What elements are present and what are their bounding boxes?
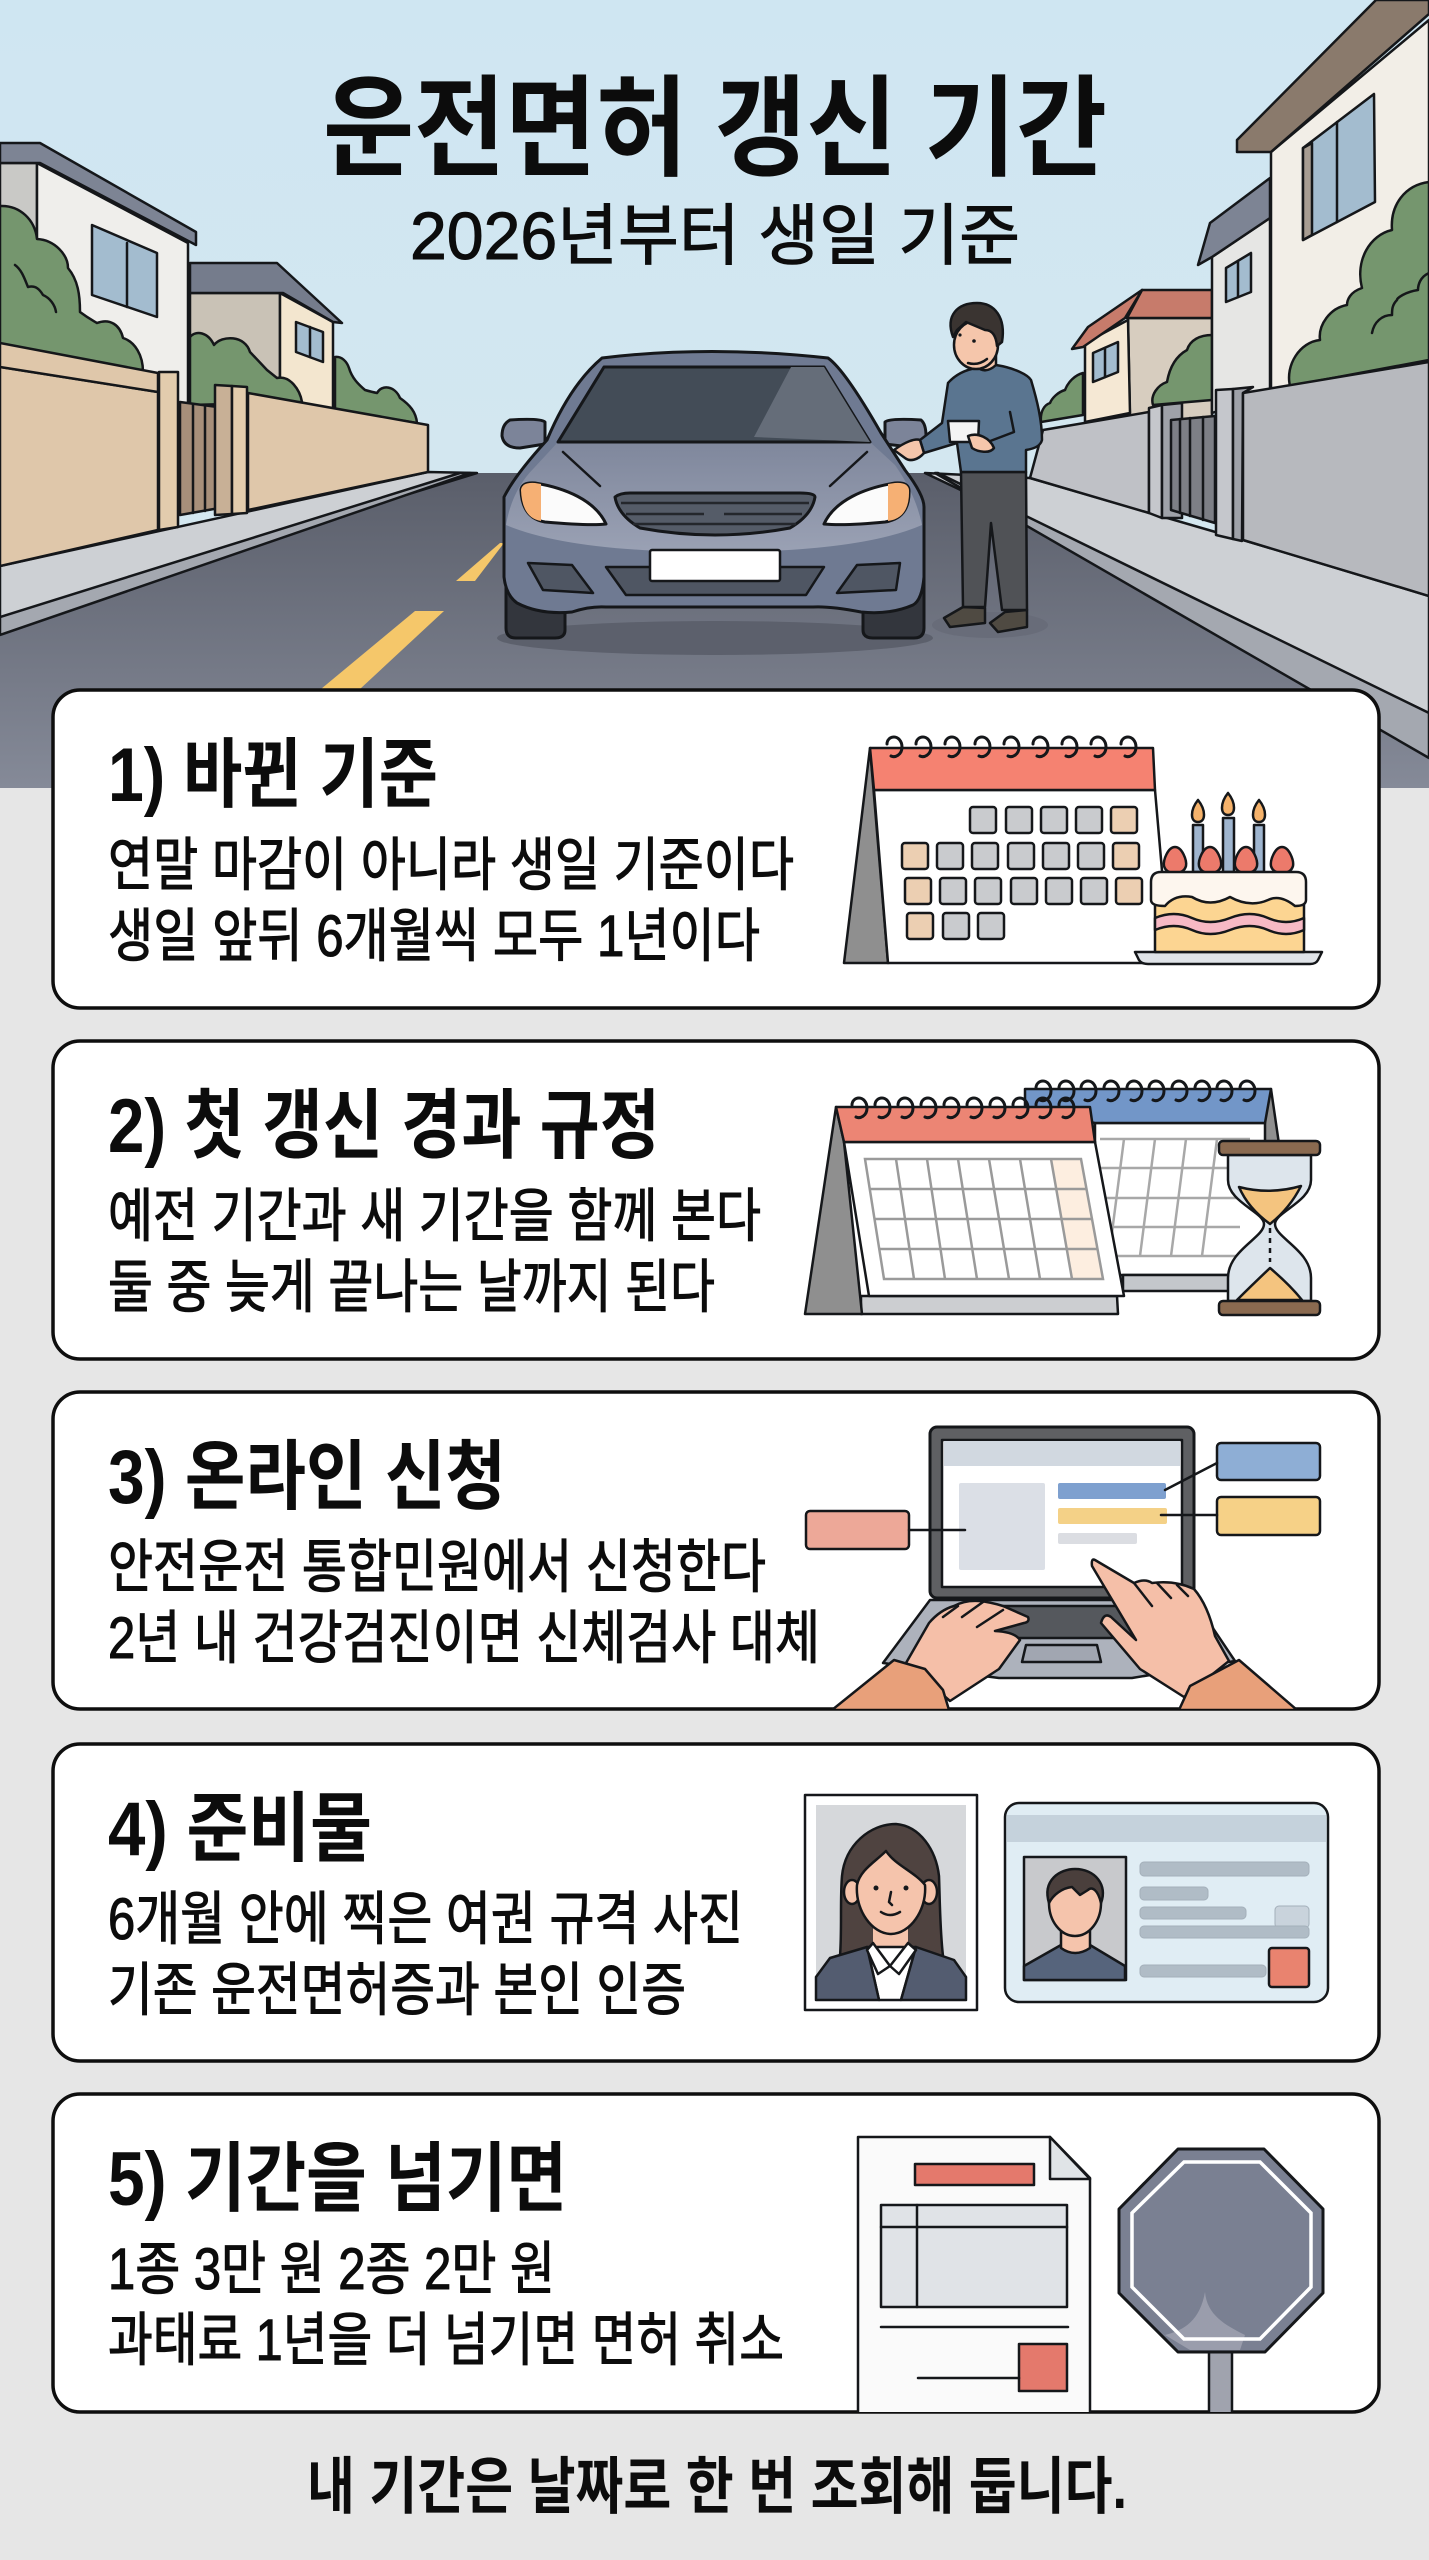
panel 3: online application bbox=[53, 1392, 1379, 1710]
footer note: 내 기간은 날짜로 한 번 조회해 둡니다. bbox=[307, 2453, 1127, 2522]
panel 4: required items bbox=[53, 1744, 1379, 2061]
hero illustration: street scene bbox=[0, 0, 1429, 788]
panel 2: first renewal transition rule bbox=[53, 1041, 1379, 1359]
text block 4: 6개월 안에 찍은 여권 규격 사진 bbox=[108, 1887, 743, 1952]
text block 1: 연말 마감이 아니라 생일 기준이다 bbox=[108, 833, 794, 898]
text block 3: 2년 내 건강검진이면 신체검사 대체 bbox=[108, 1606, 820, 1671]
icon: penalty notice document bbox=[858, 2137, 1090, 2414]
icon: blank stop sign bbox=[1119, 2149, 1323, 2414]
text block 5: 과태료 1년을 더 넘기면 면허 취소 bbox=[108, 2308, 784, 2373]
road, walls and sidewalks bbox=[0, 343, 1429, 788]
text block 2: 예전 기간과 새 기간을 함께 본다 bbox=[108, 1184, 761, 1249]
icon: two calendars and hourglass bbox=[805, 1081, 1320, 1315]
text block 5: 1종 3만 원 2종 2만 원 bbox=[108, 2237, 555, 2302]
text block 4 bbox=[108, 1887, 743, 2023]
text block 2: 둘 중 늦게 끝나는 날까지 된다 bbox=[108, 1255, 715, 1320]
text block 5 bbox=[108, 2237, 784, 2373]
man holding license bbox=[894, 303, 1048, 638]
heading 5: 5) 기간을 넘기면 bbox=[108, 2137, 567, 2222]
icon: passport photo bbox=[805, 1795, 977, 2010]
left houses bbox=[0, 143, 417, 423]
heading 3: 3) 온라인 신청 bbox=[108, 1435, 506, 1520]
icon: laptop with hands bbox=[806, 1427, 1320, 1710]
title: 운전면허 갱신 기간 bbox=[323, 68, 1107, 191]
subtitle: 2026년부터 생일 기준 bbox=[410, 199, 1020, 274]
road dashes bbox=[321, 543, 504, 689]
text block 3 bbox=[108, 1535, 820, 1671]
text block 3: 안전운전 통합민원에서 신청한다 bbox=[108, 1535, 766, 1600]
panel 5: overdue penalty bbox=[53, 2094, 1379, 2414]
heading 1: 1) 바뀐 기준 bbox=[108, 733, 438, 818]
text block 1 bbox=[108, 833, 794, 969]
text block 2 bbox=[108, 1184, 761, 1320]
panel 1: changed criteria bbox=[53, 690, 1379, 1008]
heading 2: 2) 첫 갱신 경과 규정 bbox=[108, 1084, 660, 1169]
icon: driver's license card bbox=[1005, 1803, 1328, 2002]
icon: desk calendar with birthday cake bbox=[844, 737, 1322, 964]
right houses bbox=[1041, 0, 1429, 422]
car bbox=[497, 352, 933, 655]
heading 4: 4) 준비물 bbox=[108, 1787, 372, 1872]
text block 4: 기존 운전면허증과 본인 인증 bbox=[108, 1958, 686, 2023]
text block 1: 생일 앞뒤 6개월씩 모두 1년이다 bbox=[108, 904, 760, 969]
